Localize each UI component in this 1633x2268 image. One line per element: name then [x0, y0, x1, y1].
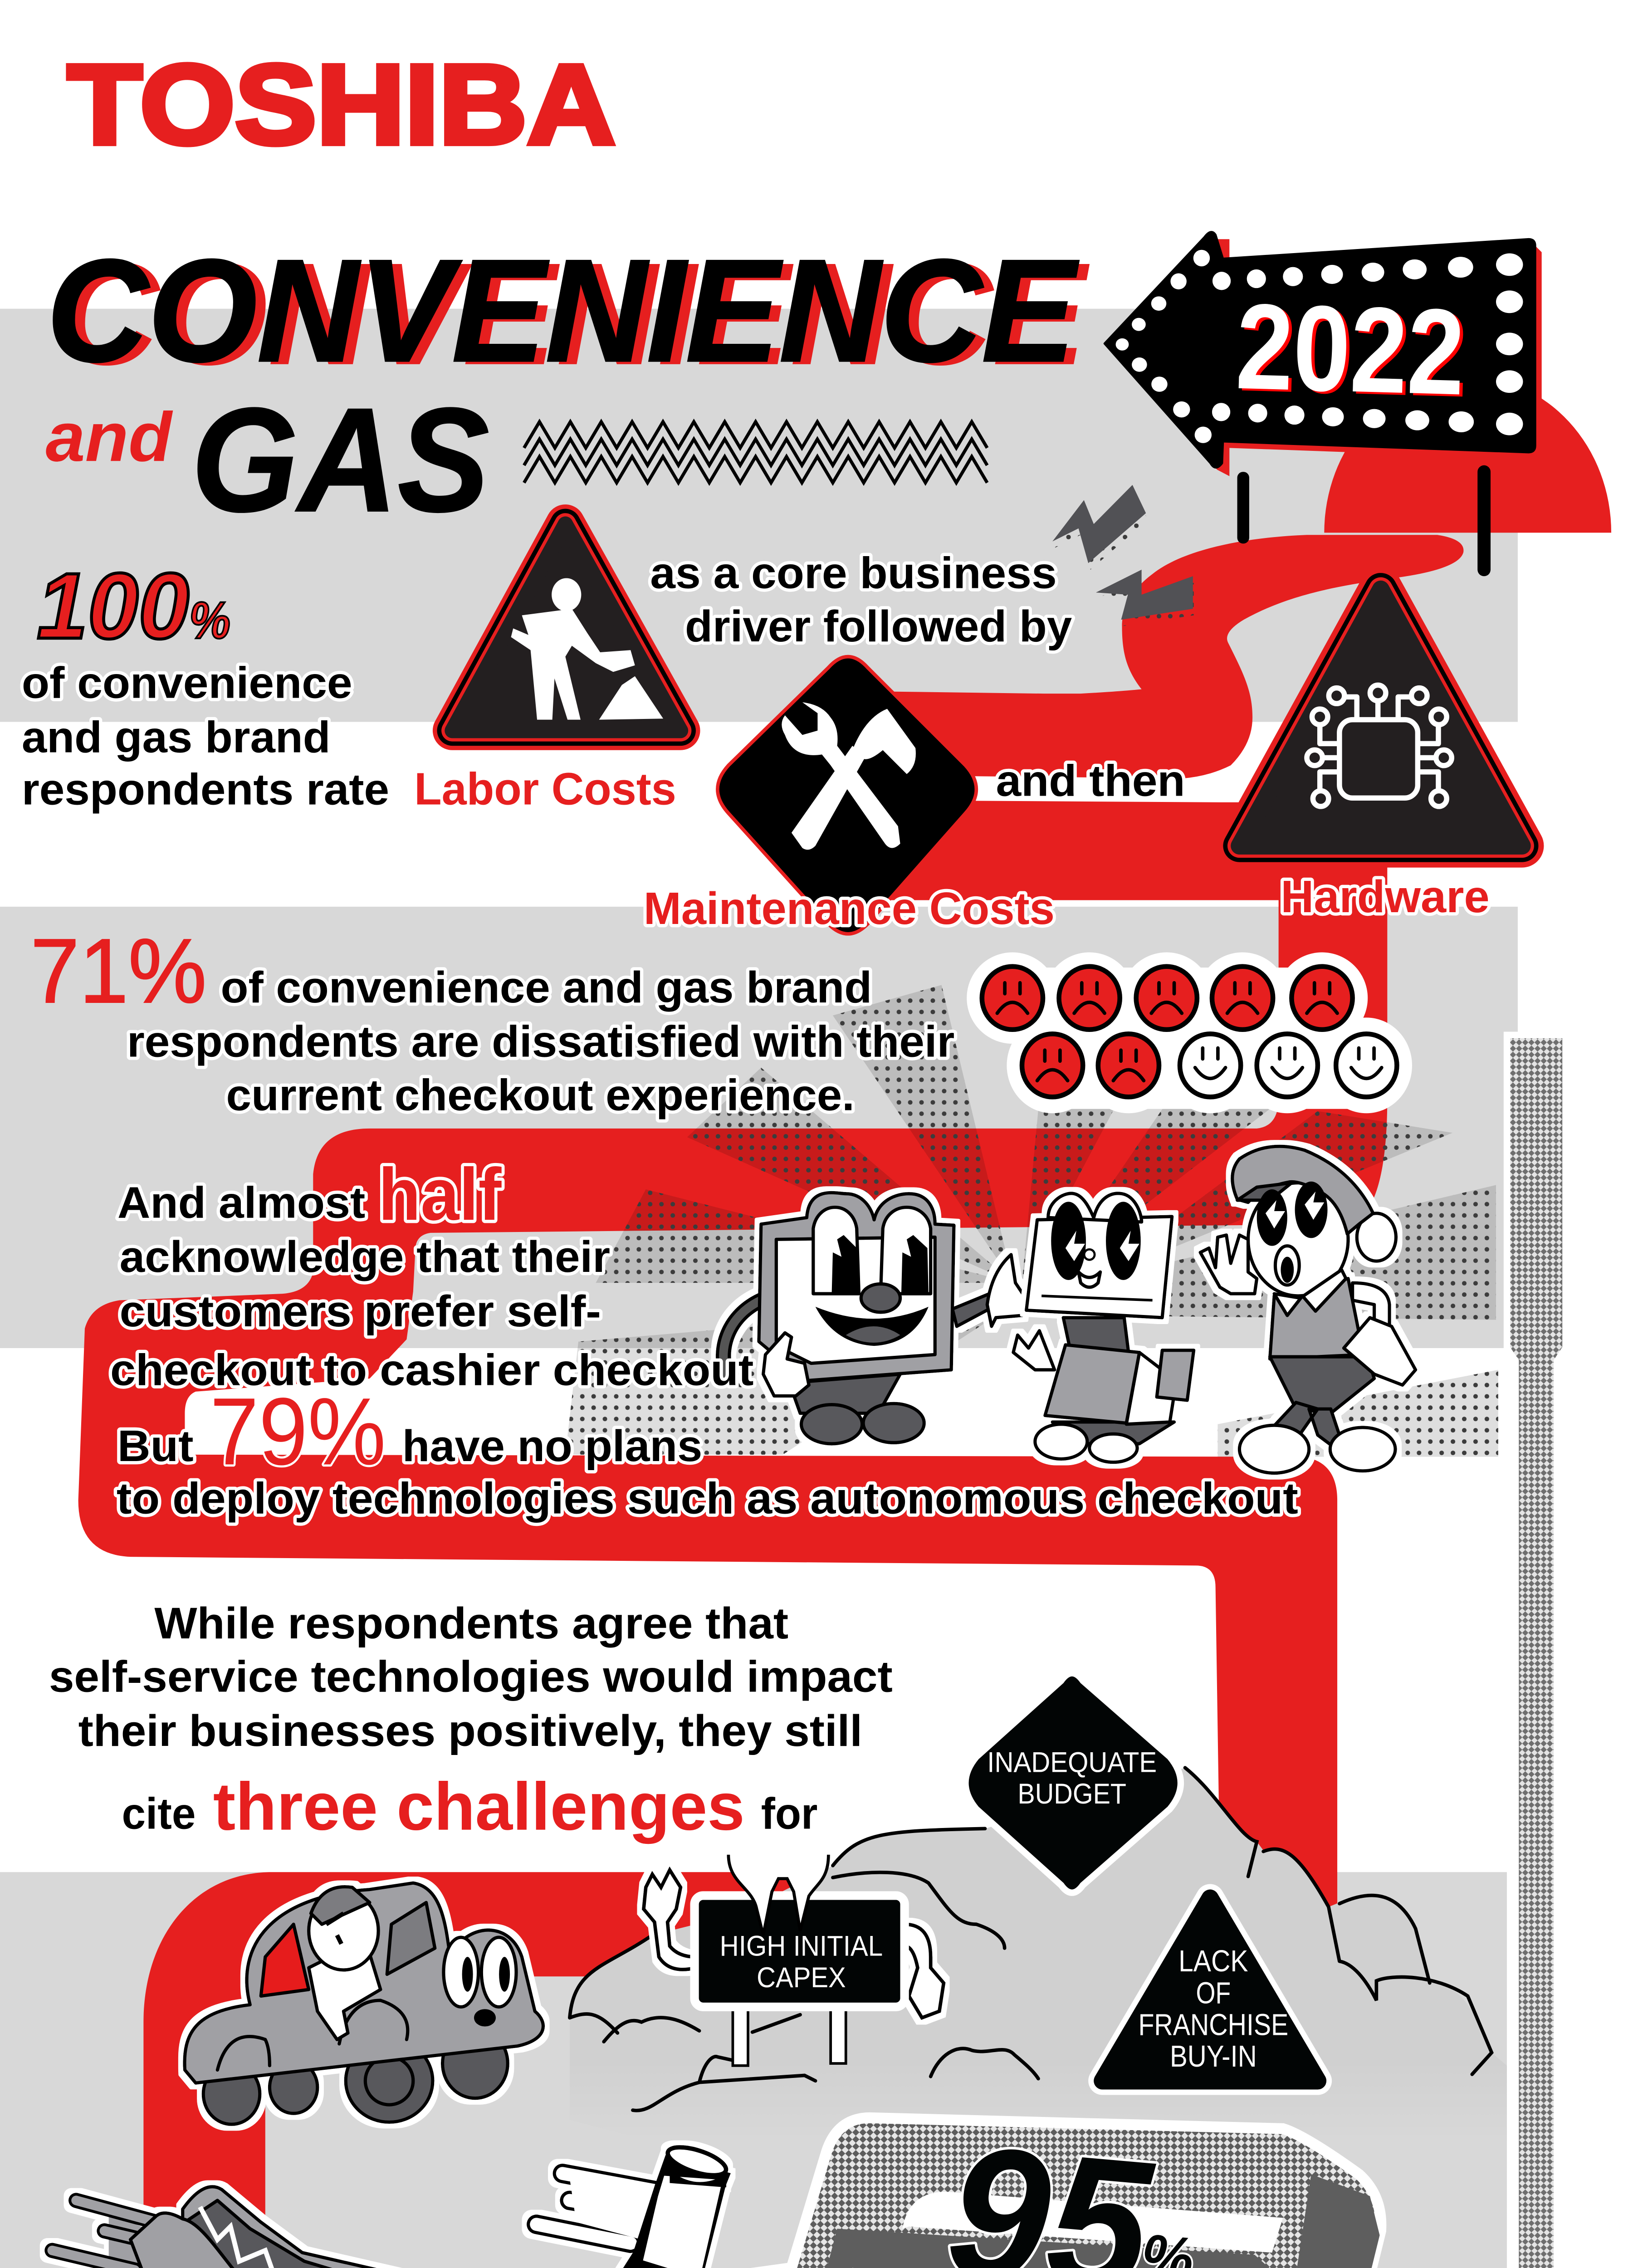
challenge: high initial capex billboard [644, 1855, 944, 2066]
label: Labor Costs: Labor Costs [414, 764, 676, 815]
challenge: franchise buy-in triangle: BUY-IN [1170, 2039, 1257, 2073]
red dome behind sign [1324, 376, 1611, 533]
label: Maintenance Costs: Maintenance Costs [644, 883, 1055, 934]
text: 79 percent have no plans: have no plans [402, 1421, 702, 1471]
background grey band: middle [0, 907, 1518, 1348]
hills landscape [570, 1768, 1507, 2142]
challenge: inadequate budget diamond: INADEQUATE [987, 1747, 1157, 1779]
title [46, 230, 1091, 543]
challenge: high initial capex billboard: CAPEX [757, 1962, 846, 1994]
text: three challenges [49, 1598, 893, 1844]
red road: upper squiggle [880, 535, 1463, 778]
title: CONVENIENCE [58, 233, 1091, 396]
Toshiba logo: TOSHIBA [68, 41, 616, 167]
text: three challenges: cite [122, 1788, 196, 1838]
text: as a core business driver followed by: driver followed by [685, 601, 1072, 651]
stat: 71 percent dissatisfied: of convenience and gas brand [221, 962, 872, 1012]
POS terminal halftone photo [751, 2112, 1386, 2268]
text: three challenges: While respondents agree that [154, 1598, 788, 1648]
marquee arrow sign 2022: 2022 [1234, 278, 1467, 420]
text: half of customers prefer self-checkout [110, 1153, 753, 1394]
label: and then: and then [996, 755, 1185, 805]
title: CONVENIENCE [47, 230, 1081, 392]
tall halftone pole [1507, 1035, 1565, 2268]
challenge: franchise buy-in triangle: LACK [1178, 1944, 1248, 1978]
stat: 100 percent: % [189, 591, 230, 650]
icon: maintenance costs diamond [718, 657, 976, 934]
text: 79 percent have no plans: 79% [210, 1378, 386, 1485]
text: half of customers prefer self-checkout: And almost [117, 1177, 365, 1227]
challenge: franchise buy-in triangle: OF [1196, 1976, 1231, 2010]
worker figure [511, 578, 663, 720]
text: 79 percent have no plans [117, 1378, 1298, 1523]
icon: flying soda bottle [422, 2141, 729, 2268]
text: of convenience and gas brand respondents rate: of convenience [22, 658, 352, 708]
icon: satisfaction faces [967, 953, 1412, 1113]
stat: 100 percent: 100 [37, 553, 189, 658]
text: of convenience and gas brand respondents rate [22, 658, 389, 814]
label: Hardware: Hardware [1281, 871, 1490, 922]
text: as a core business driver followed by: as a core business [650, 548, 1057, 598]
text: three challenges: their businesses positively, they still [78, 1706, 862, 1755]
background grey band: lower [0, 1872, 1507, 2268]
text: 79 percent have no plans: But [117, 1421, 194, 1471]
text: three challenges: for [761, 1788, 817, 1838]
stat: 71 percent dissatisfied [30, 920, 954, 1120]
icon: lightning bolts [1052, 485, 1194, 626]
zigzag decoration [524, 422, 987, 483]
text: half of customers prefer self-checkout: checkout to cashier checkout [110, 1344, 753, 1394]
icon: labor costs triangle [452, 524, 680, 731]
character: car with driver [185, 1883, 543, 2124]
icon: flying hot dog [52, 2187, 438, 2268]
title: GAS [191, 377, 490, 543]
halftone sunburst rays [565, 985, 1498, 1457]
hammer and wrench [782, 702, 916, 850]
character: smiling monitor [724, 1193, 1024, 1444]
text: as a core business driver followed by [650, 548, 1072, 651]
challenge: inadequate budget diamond [965, 1673, 1181, 1893]
text: of convenience and gas brand respondents rate: and gas brand [22, 712, 331, 762]
challenge: high initial capex billboard: HIGH INITIAL [720, 1930, 883, 1962]
red road: second segment down to the S-bend [78, 800, 1387, 2268]
challenge: inadequate budget diamond: BUDGET [1017, 1778, 1126, 1810]
character: small monitor [1013, 1193, 1194, 1462]
challenge: franchise buy-in triangle [1102, 1898, 1318, 2081]
text: 79 percent have no plans: to deploy technologies such as autonomous checkout [117, 1473, 1298, 1523]
text: half of customers prefer self-checkout: customers prefer self- [120, 1286, 601, 1336]
character: man in cap [1200, 1146, 1416, 1473]
marquee arrow sign 2022 [1105, 232, 1542, 476]
text: three challenges: self-service technologies would impact [49, 1651, 893, 1701]
stat: 71 percent dissatisfied: current checkout experience. [226, 1070, 855, 1120]
text: three challenges: three challenges [213, 1769, 745, 1844]
chip glyph [1307, 685, 1452, 807]
challenge: franchise buy-in triangle: FRANCHISE [1138, 2008, 1288, 2042]
sign posts [1237, 465, 1491, 576]
stat: 71 percent dissatisfied: 71% [30, 920, 206, 1022]
title: and [46, 398, 173, 476]
text: half of customers prefer self-checkout: half [378, 1153, 502, 1236]
stat: 71 percent dissatisfied: respondents are dissatisfied with their [127, 1017, 954, 1066]
text: of convenience and gas brand respondents rate: respondents rate [22, 764, 389, 814]
icon: hardware triangle [1239, 589, 1522, 846]
text: half of customers prefer self-checkout: acknowledge that their [120, 1232, 610, 1281]
background grey band: top [0, 309, 1518, 722]
marquee arrow sign 2022: 2022 [1237, 280, 1470, 422]
